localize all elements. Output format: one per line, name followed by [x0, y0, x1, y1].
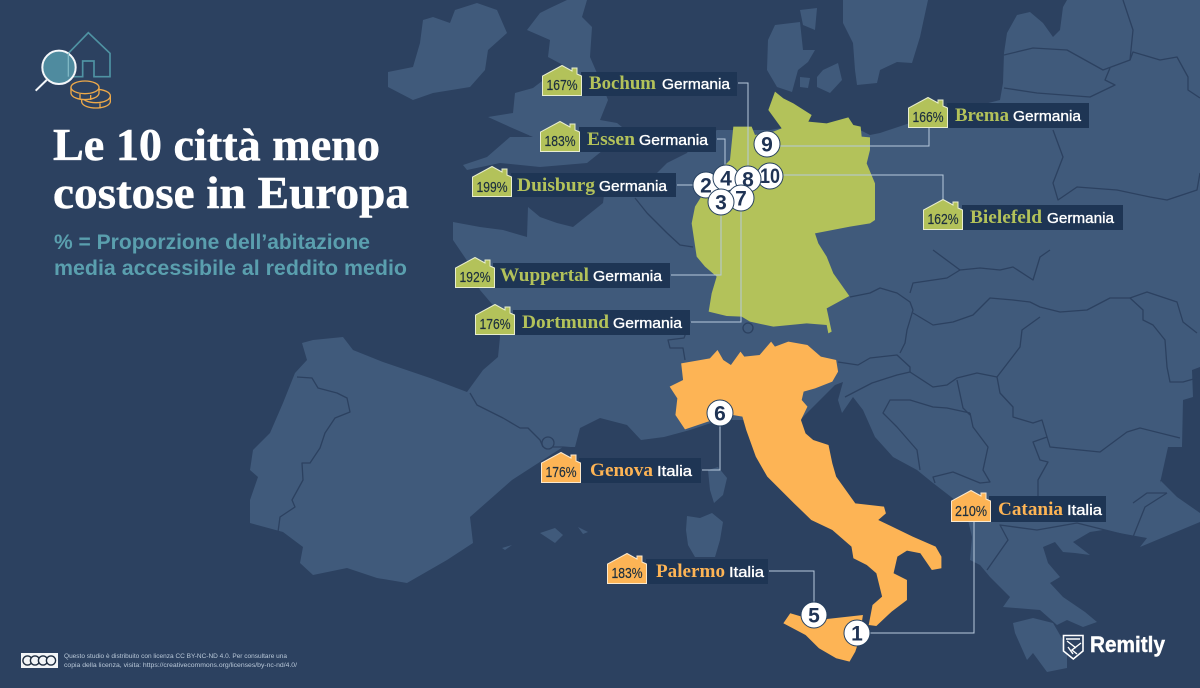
label: Bielefeld: 162%	[928, 212, 959, 228]
map markers: 1	[851, 622, 863, 646]
title: costose in Europa	[53, 167, 409, 218]
license note: copia della licenza, visita: https://creativecommons.org/licenses/by-nc-nd/4.0/	[64, 662, 297, 669]
label: Genova	[542, 452, 701, 483]
label: Dortmund: Dortmund	[522, 312, 609, 333]
label: Catania: Catania	[998, 499, 1063, 520]
map markers: 5	[808, 604, 820, 628]
label: Essen	[540, 122, 716, 152]
label: Palermo	[608, 554, 768, 584]
map markers: 9	[761, 134, 773, 156]
label: Genova: Italia	[657, 464, 693, 480]
subtitle: media accessibile al reddito medio	[54, 257, 407, 280]
map: country borders	[278, 0, 1200, 570]
label: Wuppertal: 192%	[460, 270, 491, 286]
map markers: 6	[714, 402, 726, 426]
label: Bielefeld	[924, 200, 1123, 230]
label: Dortmund: Germania	[613, 316, 683, 332]
label: Essen: 183%	[544, 134, 576, 150]
label: Catania: Italia	[1067, 503, 1103, 519]
subtitle: % = Proporzione dell’abitazione	[54, 231, 370, 254]
label: Bochum: 167%	[546, 78, 578, 94]
map markers: 4	[720, 168, 732, 190]
subtitle	[54, 231, 407, 280]
title	[53, 119, 409, 218]
label: Bochum: Germania	[662, 77, 731, 93]
label: Duisburg: Duisburg	[517, 175, 596, 196]
title: Le 10 città meno	[53, 119, 380, 170]
label: Duisburg: 199%	[476, 180, 508, 196]
map: european land	[250, 0, 1200, 672]
leader lines	[671, 83, 974, 633]
label: Brema	[908, 98, 1089, 128]
logo: Remitly: Remitly	[1090, 632, 1166, 657]
license note	[64, 653, 297, 669]
map: germany	[692, 92, 875, 333]
map markers: 10	[760, 165, 780, 188]
map markers	[693, 131, 870, 646]
label: Catania	[952, 490, 1106, 522]
label: Wuppertal: Germania	[593, 269, 663, 285]
map markers: 7	[735, 188, 747, 210]
label: Bielefeld: Bielefeld	[970, 207, 1042, 228]
label: Bochum	[542, 66, 737, 96]
license note: Questo studio è distribuito con licenza CC BY-NC-ND 4.0. Per consultare una	[64, 653, 287, 660]
map markers: 2	[700, 174, 712, 198]
label: Palermo: Italia	[729, 565, 765, 581]
map: black sea	[1160, 367, 1200, 513]
label: Wuppertal: Wuppertal	[500, 265, 589, 286]
label: Palermo: 183%	[612, 566, 643, 582]
map markers: 8	[742, 168, 754, 192]
icon: magnifier house and coins	[36, 33, 110, 108]
label: Essen: Germania	[639, 133, 709, 149]
label: Palermo: Palermo	[656, 561, 725, 582]
label: Bochum: Bochum	[589, 73, 656, 94]
label: Dortmund	[476, 304, 690, 335]
label: Genova: 176%	[546, 465, 577, 481]
label: Dortmund: 176%	[480, 317, 511, 333]
label: Duisburg: Germania	[599, 179, 668, 195]
label: Genova: Genova	[590, 460, 654, 481]
label: Catania: 210%	[955, 504, 987, 520]
label: Duisburg	[472, 166, 676, 197]
label: Brema: Germania	[1013, 109, 1082, 125]
map: italy	[670, 342, 941, 662]
logo: Remitly	[1064, 632, 1166, 659]
label: Essen: Essen	[587, 129, 635, 150]
label: Wuppertal	[456, 258, 670, 288]
label: Brema: Brema	[955, 105, 1009, 126]
map markers: 3	[715, 192, 727, 214]
creative commons badge	[21, 653, 58, 668]
label: Brema: 166%	[912, 110, 944, 126]
label: Bielefeld: Germania	[1047, 211, 1115, 227]
